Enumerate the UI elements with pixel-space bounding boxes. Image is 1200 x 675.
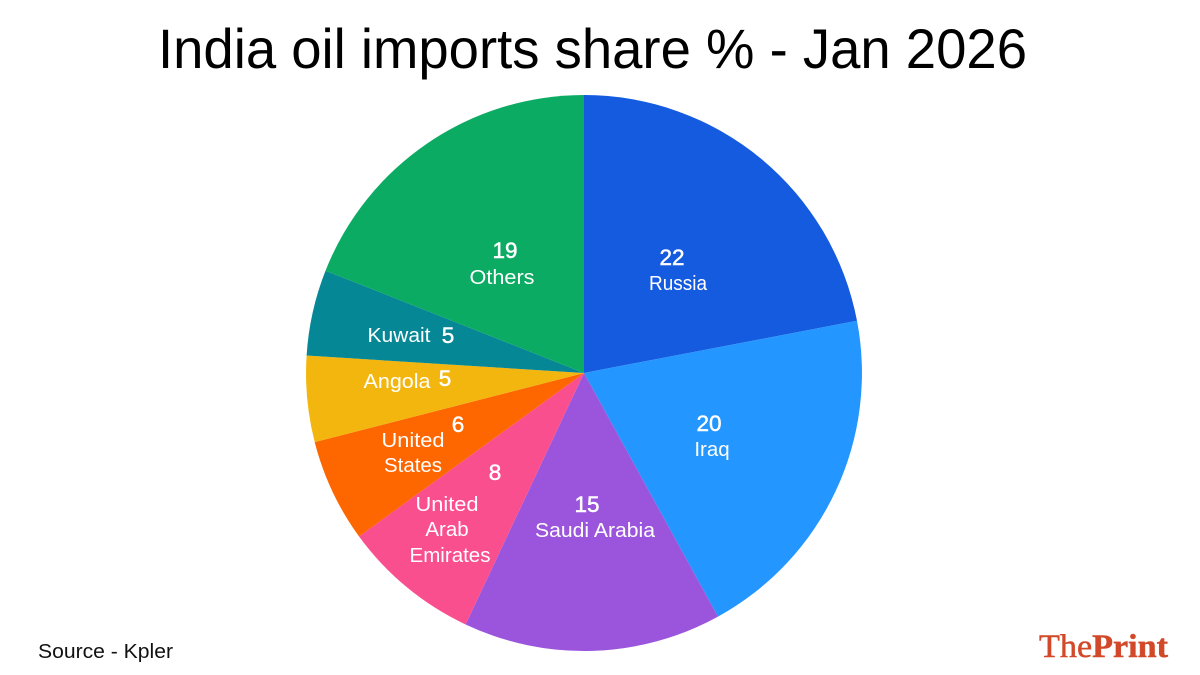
slice: United States xyxy=(315,373,584,536)
source note: Source - Kpler xyxy=(38,641,173,663)
label: Angola 5: 5 xyxy=(439,366,451,391)
label: United Arab Emirates 8: 8 xyxy=(489,460,501,485)
label: Russia 22: Russia xyxy=(649,272,708,295)
label: Iraq 20 xyxy=(694,411,730,461)
slice: Saudi Arabia xyxy=(466,373,718,651)
label: United States 6: States xyxy=(384,454,442,477)
label: Others 19: 19 xyxy=(492,238,518,263)
slice: Others xyxy=(326,95,584,373)
slice: Angola xyxy=(306,356,584,442)
label: United Arab Emirates 8: United xyxy=(416,493,478,516)
label: United States 6: United xyxy=(382,429,444,452)
title: India oil imports share % - Jan 2026 xyxy=(158,17,1027,80)
slice: Iraq xyxy=(584,321,862,617)
label: Iraq 20: Iraq xyxy=(694,438,730,461)
label: Others 19: Others xyxy=(470,266,534,289)
label: Russia 22: 22 xyxy=(659,245,685,270)
pie chart xyxy=(306,95,862,651)
label: United States 6: 6 xyxy=(452,412,464,437)
logo: ThePrint: ThePrint xyxy=(1039,629,1168,665)
label: United States 6 xyxy=(382,412,464,477)
label: Kuwait 5: Kuwait xyxy=(368,324,431,347)
label: United Arab Emirates 8: Emirates xyxy=(410,544,490,567)
label: United Arab Emirates 8 xyxy=(410,460,501,567)
label: Angola 5: Angola xyxy=(364,370,431,393)
label: Kuwait 5: 5 xyxy=(442,323,454,348)
label: Saudi Arabia 15: 15 xyxy=(574,492,600,517)
label: Saudi Arabia 15: Saudi Arabia xyxy=(535,519,656,542)
label: Angola 5 xyxy=(364,366,451,393)
label: Iraq 20: 20 xyxy=(696,411,722,436)
label: Russia 22 xyxy=(649,245,708,295)
label: United Arab Emirates 8: Arab xyxy=(425,518,469,541)
slice: Kuwait xyxy=(307,271,584,373)
slice: Russia xyxy=(584,95,857,373)
label: Kuwait 5 xyxy=(368,323,454,348)
slice: United Arab Emirates xyxy=(359,373,584,624)
label: Others 19 xyxy=(470,238,534,289)
label: Saudi Arabia 15 xyxy=(535,492,656,542)
